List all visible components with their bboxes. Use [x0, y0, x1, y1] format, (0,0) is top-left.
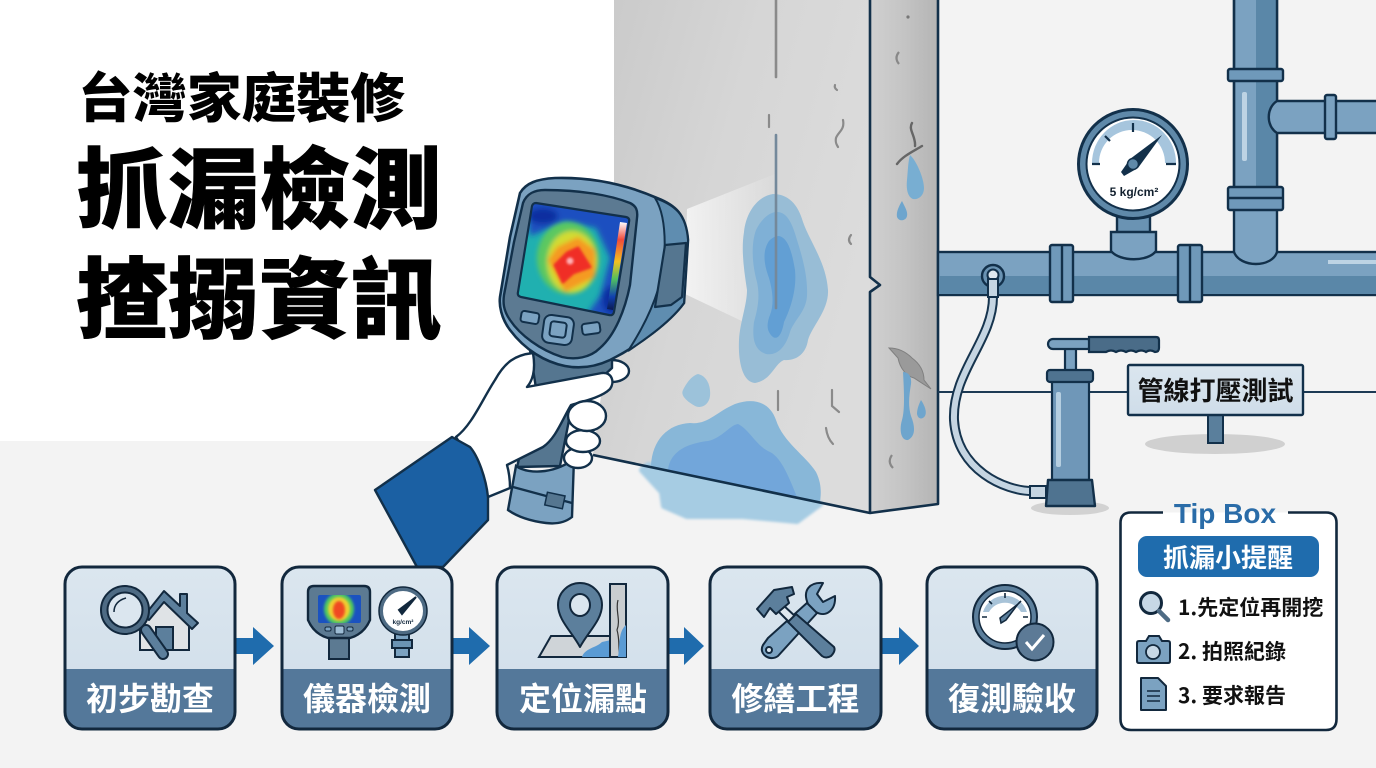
main horizontal pipe: [938, 245, 1376, 302]
pressure gauge: [1078, 110, 1188, 259]
index fingertip: [595, 360, 629, 382]
sign: pipe pressure test: [1128, 365, 1303, 454]
camera side shell: [628, 198, 688, 351]
icon: gauge: kg/cm²: [393, 619, 414, 626]
step 3: locate leak: [497, 567, 668, 729]
card: [282, 567, 452, 729]
gauge needle: [1121, 135, 1162, 176]
label: 修繕工程: [731, 674, 860, 720]
thermal screen: [518, 204, 628, 314]
wall stain puddle outer: [648, 401, 821, 502]
sign label: 管線打壓測試: [1137, 371, 1294, 408]
branch pipe: [1269, 95, 1376, 139]
concrete wall column: [593, 0, 938, 521]
camera side panel: [655, 243, 686, 307]
card: [710, 567, 881, 729]
hose connector: [1030, 486, 1046, 498]
sign shadow: [1145, 434, 1285, 454]
camera bezel: [504, 190, 637, 358]
pump shadow: [1031, 501, 1109, 515]
gauge hub: [1128, 158, 1138, 170]
step 1: initial inspection: [65, 567, 235, 729]
small stain: [682, 374, 710, 407]
step 5: re-test and acceptance: [927, 567, 1097, 729]
back wall line: [938, 391, 1376, 393]
valve: [982, 265, 1004, 287]
sign board: [1128, 365, 1303, 415]
thermal beam: [685, 174, 775, 333]
camera grip: [517, 350, 612, 467]
icon: gauge: [379, 587, 427, 657]
gauge dial: [1078, 110, 1188, 218]
air pump: [1031, 337, 1159, 515]
title line 2: 抓漏檢測: [76, 120, 442, 247]
gauge reading: 5 kg/cm²: [1110, 185, 1158, 199]
main water stain: [739, 194, 828, 383]
card: [927, 567, 1097, 729]
label: 初步勘查: [86, 674, 214, 720]
process step arrows: [234, 627, 919, 665]
tip box banner: 抓漏小提醒: [1163, 538, 1293, 575]
pump handle: [1048, 339, 1092, 349]
gauge arc: [1092, 120, 1176, 163]
side face cracks and drips: [889, 15, 931, 468]
pipe collars: [1228, 69, 1283, 210]
wall cracks: [769, 0, 851, 444]
colour scale bar: [607, 222, 627, 310]
icon: check badge: [1016, 624, 1054, 660]
icon: hammer: [757, 587, 835, 658]
gauge stem: [1111, 216, 1156, 259]
pump base: [1046, 480, 1095, 506]
water pipes: [938, 0, 1376, 302]
glove palm: [456, 353, 612, 497]
title line 3: 揸搦資訊: [76, 230, 442, 357]
tip 3: 3. 要求報告: [1178, 680, 1286, 710]
pump grip: [1089, 337, 1159, 352]
sign post: [1208, 414, 1223, 443]
wall stain puddle inner: [668, 424, 797, 497]
icon: gauge: [973, 585, 1037, 649]
wall outlines: [593, 0, 938, 513]
vertical pipe: [1234, 0, 1277, 188]
pump rod: [1065, 348, 1076, 372]
floor puddle: [642, 465, 820, 521]
camera battery: [508, 458, 574, 523]
icon: wrench: [762, 583, 835, 658]
gauge ticks: [1092, 123, 1176, 164]
card: [65, 567, 235, 729]
wall front face: [593, 0, 870, 513]
tip box: [1120, 498, 1336, 730]
tip 2: 2. 拍照紀錄: [1178, 636, 1286, 666]
label: 復測驗收: [948, 674, 1076, 720]
title line 1: 台灣家庭裝修: [78, 57, 405, 133]
jacket cuff: [375, 437, 488, 567]
title: [76, 57, 442, 357]
tip box banner: [1138, 536, 1319, 577]
icon: house with magnifier: [101, 586, 198, 654]
wall side face: [870, 0, 938, 513]
glove fingers: [564, 401, 606, 468]
label: 儀器檢測: [303, 674, 431, 720]
hand holding thermal camera: [375, 178, 688, 567]
icon: map with pin and wall: [539, 583, 626, 657]
camera body: [500, 178, 688, 367]
label: 定位漏點: [519, 674, 647, 720]
tip 1: 1.先定位再開挖: [1178, 592, 1323, 622]
tip 3: [1141, 678, 1286, 710]
pipe elbow: [1234, 188, 1277, 264]
hose: [954, 297, 1032, 491]
tip box heading: Tip Box: [1174, 498, 1277, 529]
step 2: instrument testing: [282, 567, 452, 729]
step 4: repair work: [710, 567, 881, 729]
hose and valve: [954, 265, 1046, 498]
icon: thermal camera: [308, 586, 370, 659]
card: [497, 567, 668, 729]
tip box frame: [1120, 512, 1336, 730]
pump barrel: [1052, 380, 1089, 480]
camera buttons: [520, 311, 601, 346]
screen outline: [518, 203, 629, 315]
pump collar: [1047, 370, 1093, 382]
